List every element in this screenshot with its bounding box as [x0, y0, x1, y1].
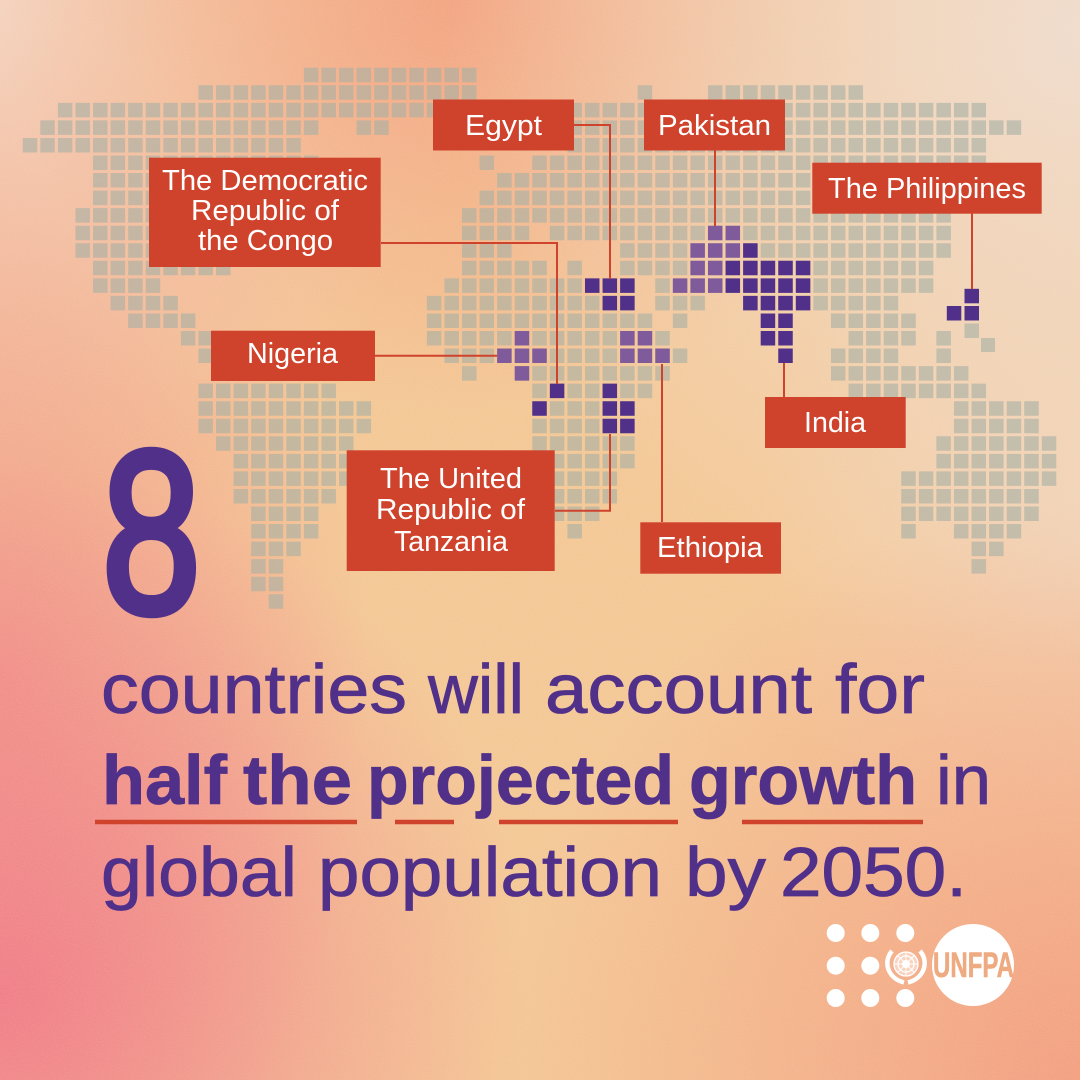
- label: The United Republic of Tanzania: Republic of: [376, 494, 526, 526]
- label: India: [765, 363, 906, 448]
- big number 8: 8: [102, 403, 201, 661]
- icon: UN emblem: [887, 951, 925, 982]
- headline text: population: [318, 833, 662, 911]
- label: The Democratic Republic of the Congo: [149, 158, 557, 384]
- headline text: will: [427, 650, 524, 728]
- label: Pakistan: Pakistan: [658, 110, 771, 142]
- label: The United Republic of Tanzania: Tanzania: [394, 526, 509, 558]
- headline text: the: [243, 741, 352, 819]
- headline text: account: [545, 650, 812, 728]
- label: Nigeria: Nigeria: [247, 338, 339, 370]
- label: Egypt: [433, 100, 610, 279]
- label: The Democratic Republic of the Congo: Republic of: [191, 195, 340, 227]
- headline text: growth: [689, 741, 917, 819]
- headline text: in: [936, 741, 991, 819]
- headline text: countries: [101, 650, 407, 728]
- world map dot grid: [23, 75, 1059, 602]
- label: Pakistan: [644, 100, 785, 226]
- headline text: by: [685, 833, 766, 911]
- label: Ethiopia: Ethiopia: [657, 532, 764, 564]
- headline text: half: [102, 741, 228, 819]
- label: The Philippines: The Philippines: [828, 173, 1026, 205]
- label: The United Republic of Tanzania: [347, 434, 610, 571]
- logo wordmark: UNFPA: [933, 946, 1014, 985]
- label: India: India: [804, 407, 867, 439]
- label: The Philippines: [812, 163, 1042, 289]
- label: The United Republic of Tanzania: The United: [380, 463, 522, 495]
- UNFPA logo: [827, 924, 1014, 1007]
- label: Egypt: Egypt: [465, 110, 542, 142]
- label: The Democratic Republic of the Congo: the Congo: [198, 225, 333, 257]
- headline text: 2050.: [780, 833, 967, 911]
- headline text: global: [101, 833, 297, 911]
- headline text: for: [835, 650, 925, 728]
- label: Nigeria: [211, 331, 497, 381]
- underline: half the projected growth: [95, 820, 923, 824]
- headline text: projected: [367, 741, 674, 819]
- headline text: [95, 650, 991, 911]
- label: Ethiopia: [640, 364, 781, 574]
- label: The Democratic Republic of the Congo: The Democratic: [162, 165, 368, 197]
